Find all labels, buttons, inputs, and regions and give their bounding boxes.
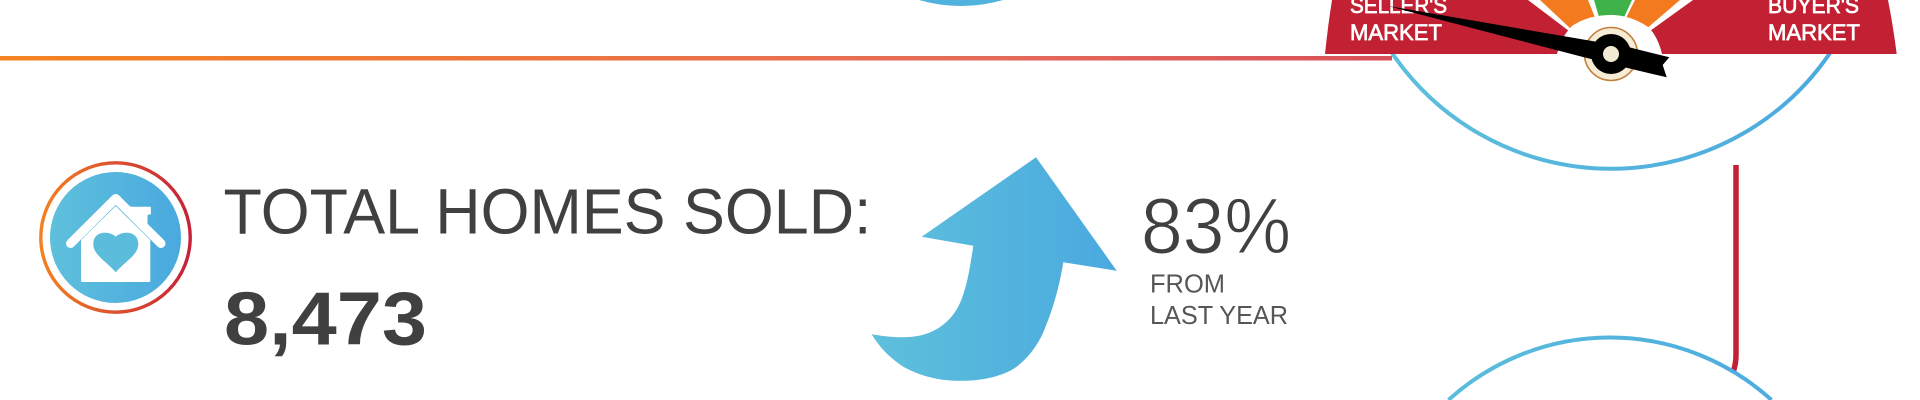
gauge needle [1388, 6, 1669, 77]
gauge green segment [1594, 0, 1632, 24]
roof [70, 198, 161, 244]
gauge hub cap [1591, 34, 1631, 74]
seller's market label: MARKET [1350, 20, 1442, 45]
value: homes sold: 8,473 [224, 276, 427, 360]
caption: from last year: LAST YEAR [1150, 302, 1288, 330]
value: 83 percent: 83% [1141, 181, 1291, 270]
buyer's market label: MARKET [1768, 20, 1860, 45]
gauge hub ring [1584, 28, 1638, 80]
gauge lower blue circle arc [1392, 53, 1830, 169]
chimney [128, 207, 151, 228]
arrow: upward growth [872, 157, 1117, 381]
caption: from last year: FROM [1150, 270, 1225, 298]
icon ring [41, 163, 190, 312]
gradient divider line [0, 56, 1392, 60]
heart [93, 233, 138, 272]
gauge orange segment left [1540, 0, 1600, 30]
icon disc [50, 172, 181, 303]
heading: total homes sold: TOTAL HOMES SOLD: [224, 175, 872, 247]
gauge white hub backing [1557, 15, 1662, 54]
icon: house with heart [41, 163, 190, 312]
top blue circle fragment [919, 0, 1003, 6]
gauge orange segment right [1620, 0, 1680, 30]
gauge centre wedge [1528, 0, 1693, 54]
gauge hub centre [1603, 46, 1619, 62]
house body [81, 206, 150, 282]
next panel blue circle arc [1448, 338, 1772, 400]
gauge red band [1325, 0, 1897, 54]
red connector line [1734, 165, 1736, 371]
market gauge [1325, 0, 1897, 80]
